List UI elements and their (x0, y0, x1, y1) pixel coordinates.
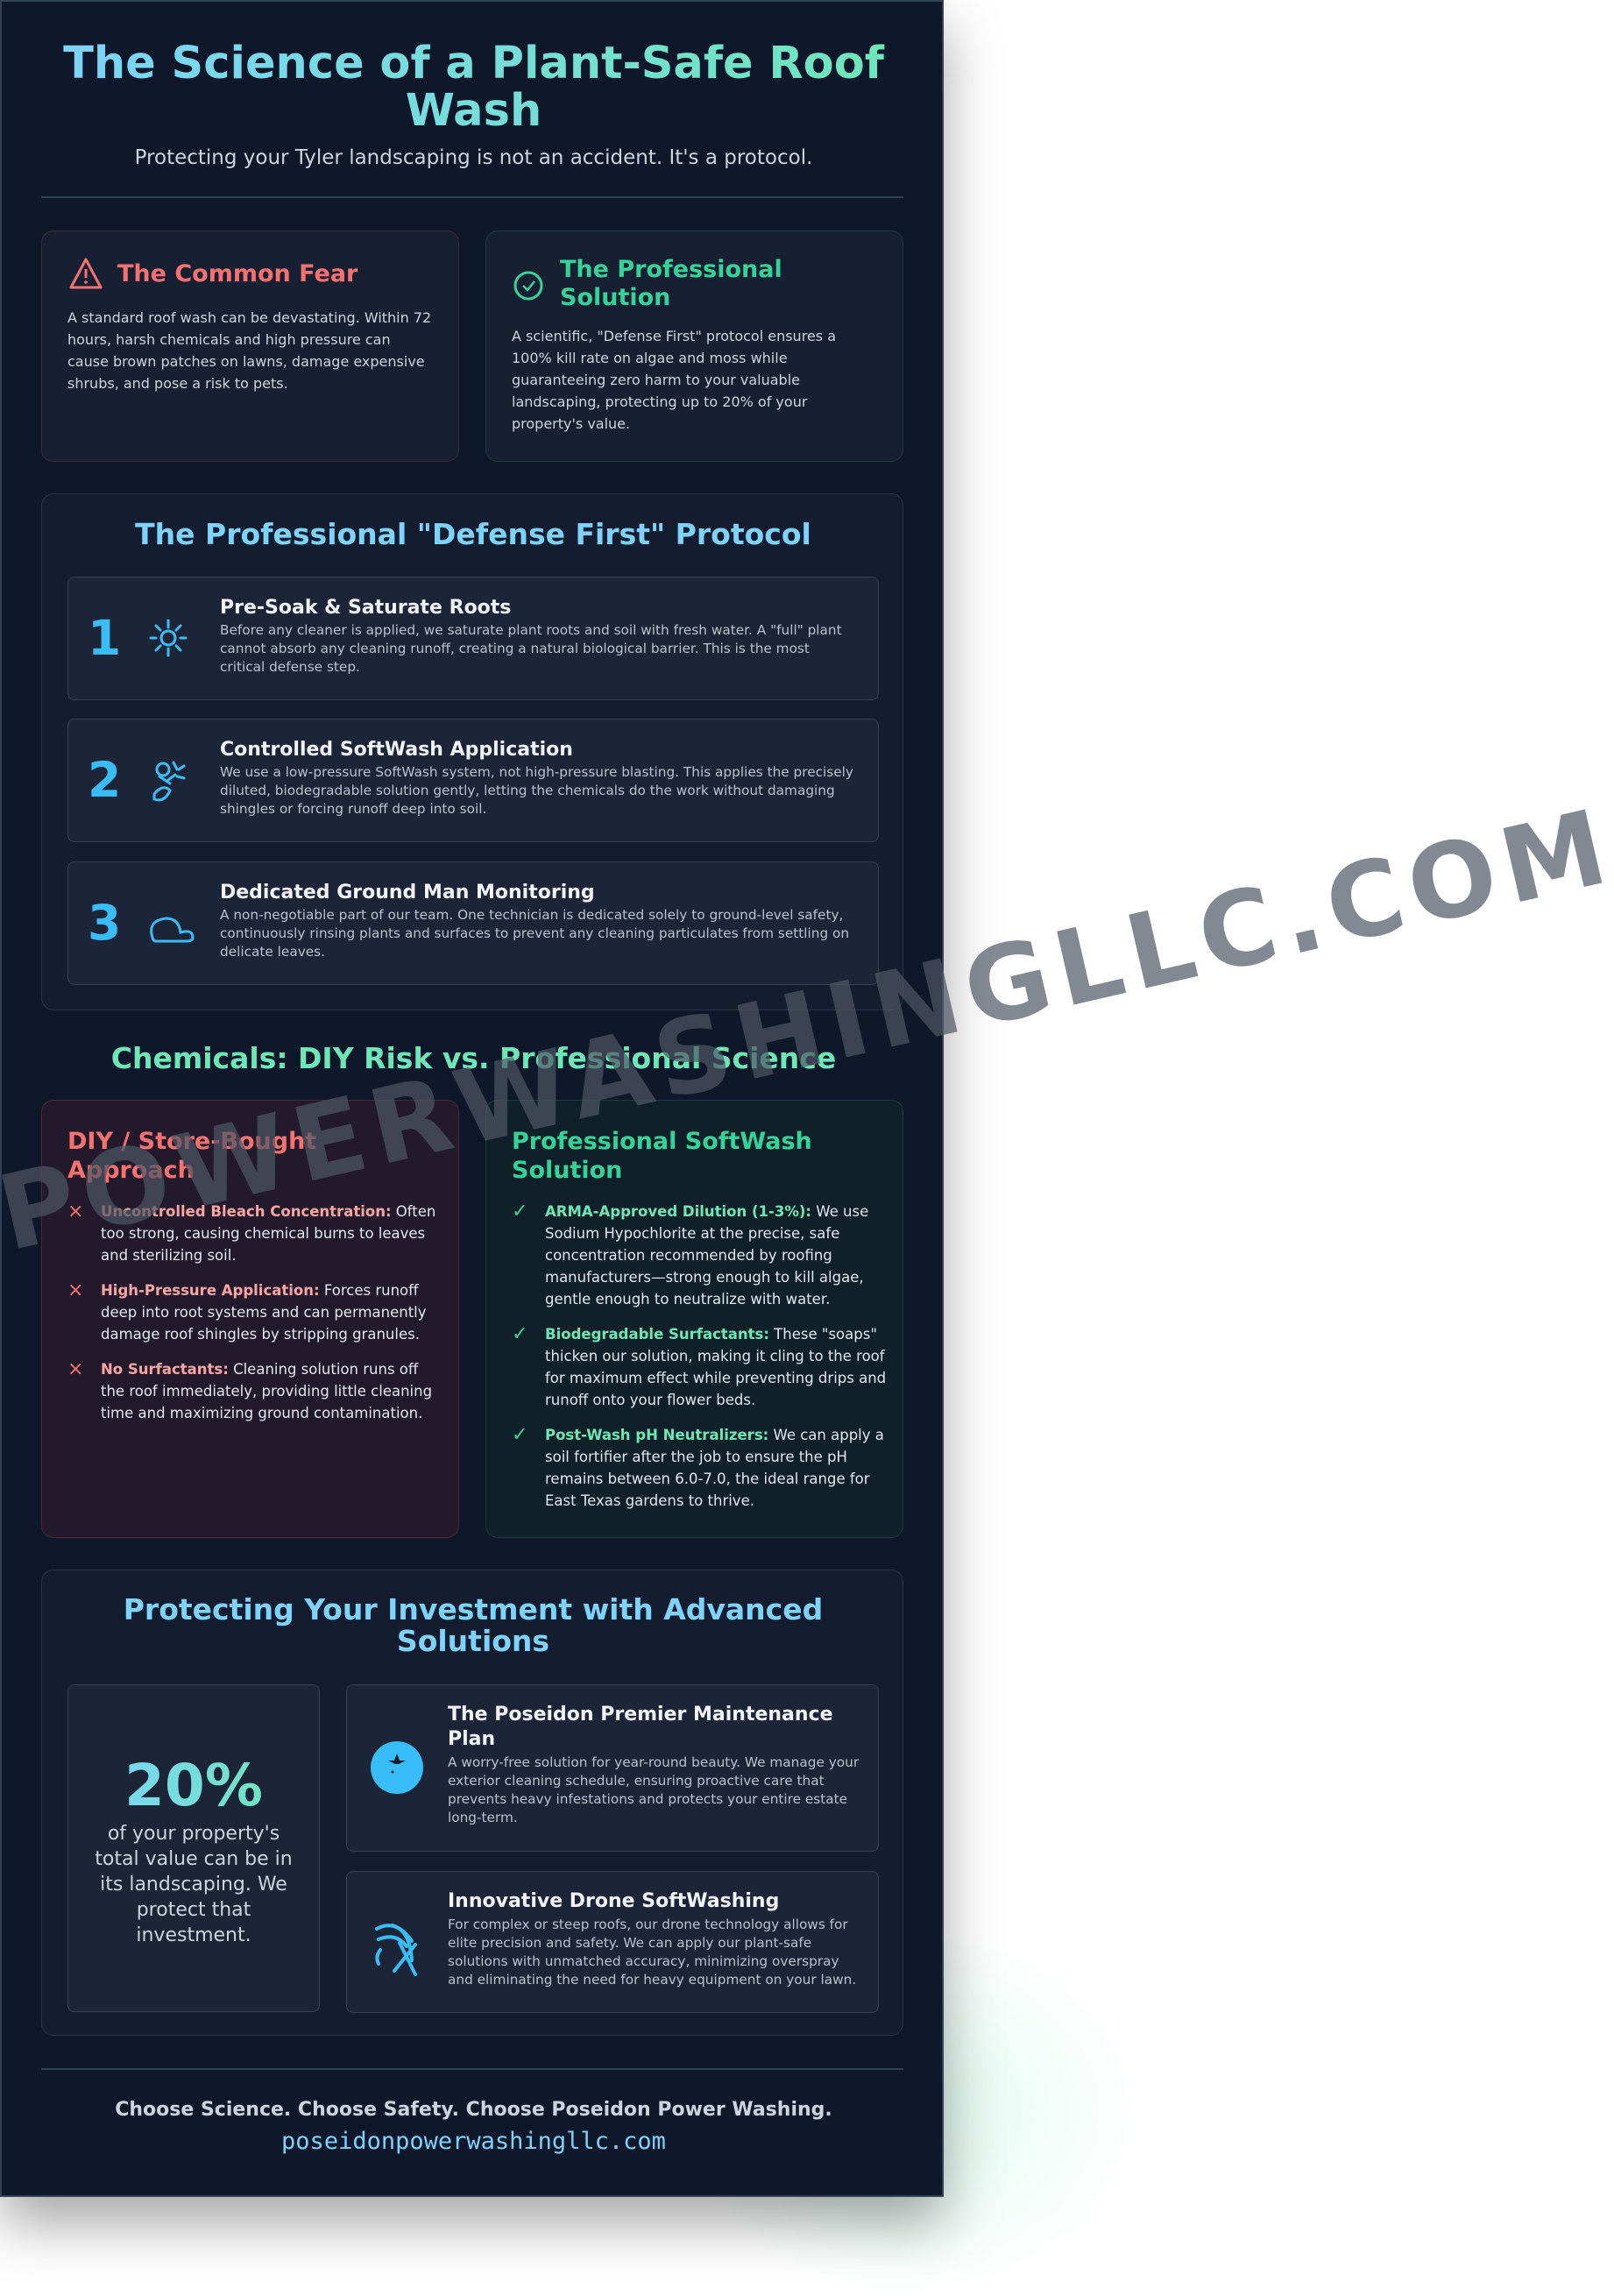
stat card: 20% (67, 1684, 320, 2012)
watermark: POWERWASHINGLLC.COM (0, 785, 1614, 1274)
heading: professional solution: The Professional (560, 256, 782, 283)
heading: DIY: Approach (67, 1157, 195, 1184)
step 1: 1 (88, 610, 121, 666)
icon: drone spray (375, 1924, 417, 1977)
icon: warning triangle (70, 258, 103, 289)
icon: spray (152, 761, 186, 801)
heading: investment: Protecting Your Investment with Advanced (124, 1592, 823, 1626)
step 3: 3 (88, 895, 121, 951)
heading: chemicals: Chemicals: DIY Risk vs. Professional Science (111, 1041, 836, 1075)
step 2: We use a low-pressure SoftWash system, not high-pressure blasting. This applies the precisely diluted, biodegradable solution gently, letting the chemicals do the work without damaging shingles or forcing runoff deep into soil. (220, 764, 853, 817)
heading: professional softwash (512, 1128, 812, 1184)
heading: professional solution: Solution (560, 284, 670, 311)
list: professional benefits: ✓ (512, 1424, 527, 1446)
list: DIY risks: × (67, 1201, 83, 1222)
subtitle: Protecting your Tyler landscaping is not an accident. It's a protocol. (135, 146, 812, 169)
step 2 (67, 719, 879, 842)
heading: professional softwash: Solution (512, 1157, 622, 1184)
text: fear description: A standard roof wash can be devastating. Within 72 hours, harsh chemicals and high pressure can cause brown patches on lawns, damage expensive shrubs, and pose a risk to pets. (67, 309, 431, 392)
heading: the common fear: The Common Fear (117, 260, 357, 287)
card: drone softwashing (346, 1871, 879, 2013)
list: DIY risks: Uncontrolled Bleach Concentration: Often too strong, causing chemical burns to leaves and sterilizing soil. (101, 1203, 435, 1264)
card: poseidon premier plan: A worry-free solution for year-round beauty. We manage your exterior cleaning schedule, ensuring proactive care that prevents heavy infestations and protects your entire estate long-term. (448, 1754, 859, 1825)
list: DIY risks: × (67, 1279, 83, 1301)
stat number (68, 1751, 319, 1821)
stat number: 20% (124, 1752, 263, 1819)
infographic page (0, 0, 944, 2197)
list: professional benefits (512, 1201, 886, 1509)
step 3: A non-negotiable part of our team. One technician is dedicated solely to ground-level safety, continuously rinsing plants and surfaces to prevent any cleaning particulates from settling on delicate leaves. (220, 907, 849, 960)
panel: the common fear (41, 230, 459, 462)
list: professional benefits: ARMA-Approved Dilution (1-3%): We use Sodium Hypochlorite at the precise, safe concentration recommended by roofing manufacturers—strong enough to kill algae, gentle enough to neutralize with water. (545, 1203, 868, 1307)
list: professional benefits: Post-Wash pH Neutralizers: We can apply a soil fortifier after the job to ensure the pH remains between 6.0-7.0, the ideal range for East Texas gardens to thrive. (545, 1427, 884, 1509)
list: DIY risks (67, 1201, 435, 1421)
heading: DIY (67, 1128, 316, 1184)
step 1: Pre-Soak & Saturate Roots (220, 597, 511, 619)
heading: protocol: The Professional "Defense First" Protocol (135, 517, 811, 551)
panel: protecting your investment (41, 1570, 903, 2036)
list: professional benefits: ✓ (512, 1201, 527, 1222)
step 3: Dedicated Ground Man Monitoring (220, 882, 595, 904)
heading: investment (124, 1592, 823, 1658)
icon: cloud (150, 917, 195, 943)
list: DIY risks: High-Pressure Application: Forces runoff deep into root systems and can permanently damage roof shingles by stripping granules. (101, 1282, 427, 1343)
panel: professional softwash (485, 1100, 903, 1538)
icon: trident badge (371, 1741, 423, 1794)
card: drone softwashing: Innovative Drone SoftWashing (448, 1890, 779, 1912)
list: DIY risks: No Surfactants: Cleaning solution runs off the roof immediately, providing little cleaning time and maximizing ground contamination. (101, 1361, 432, 1421)
text: solution description: A scientific, "Defense First" protocol ensures a 100% kill rate on algae and moss while guaranteeing zero harm to your valuable landscaping, protecting up to 20% of your property's value. (512, 328, 836, 432)
list: professional benefits: Biodegradable Surfactants: These "soaps" thicken our solution, making it cling to the roof for maximum effect while preventing drips and runoff onto your flower beds. (545, 1326, 886, 1408)
title (2, 40, 945, 135)
panel: the professional solution (485, 230, 903, 462)
card: poseidon premier plan: The Poseidon Premier Maintenance Plan (448, 1704, 833, 1750)
list: DIY risks: × (67, 1358, 83, 1380)
panel: DIY approach (41, 1100, 459, 1538)
step 1: Before any cleaner is applied, we saturate plant roots and soil with fresh water. A "full" plant cannot absorb any cleaning runoff, creating a natural biological barrier. This is the most critical defense step. (220, 622, 842, 675)
panel: defense first protocol (41, 493, 903, 1010)
stat description: of your property's total value can be in its landscaping. We protect that investment. (95, 1823, 293, 1946)
heading: investment: Solutions (397, 1624, 549, 1658)
step 2: 2 (88, 752, 121, 808)
footer tagline: Choose Science. Choose Safety. Choose Poseidon Power Washing. (115, 2099, 832, 2121)
heading: DIY: DIY / Store-Bought (67, 1128, 316, 1155)
title: Wash (406, 85, 542, 137)
step 1 (67, 577, 879, 700)
card: poseidon premier plan (346, 1684, 879, 1852)
icon: sun (149, 619, 188, 657)
step 3 (67, 861, 879, 985)
heading: professional solution (560, 256, 782, 311)
icon: check circle (513, 272, 543, 300)
list: professional benefits: ✓ (512, 1323, 527, 1345)
title: The Science of a Plant-Safe Roof (63, 38, 884, 89)
card: drone softwashing: For complex or steep roofs, our drone technology allows for elite precision and safety. We can apply our plant-safe solutions with unmatched accuracy, minimizing overspray and eliminating the need for heavy equipment on your lawn. (448, 1917, 856, 1988)
footer url: poseidonpowerwashingllc.com (281, 2128, 666, 2155)
step 2: Controlled SoftWash Application (220, 739, 573, 761)
heading: professional softwash: Professional SoftWash (512, 1128, 812, 1155)
